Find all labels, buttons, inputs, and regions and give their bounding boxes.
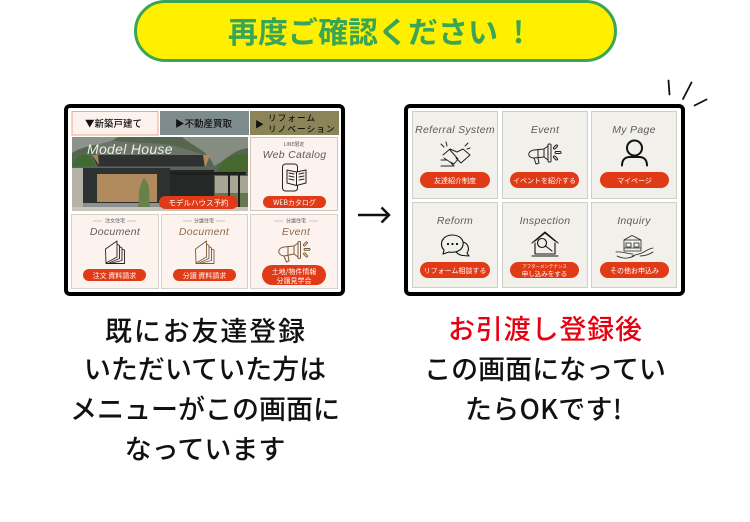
card: subdivision document: 分譲住宅 (194, 218, 214, 224)
card: my page (592, 112, 676, 198)
card: referral system (412, 112, 498, 198)
card: custom home document: Document (90, 226, 141, 238)
photo: model house (72, 137, 248, 211)
icon: handshake (441, 142, 470, 166)
tab: real estate purchase (160, 111, 249, 135)
card: event: 分譲住宅 (286, 218, 306, 224)
tab: reform and renovation: ▶ (255, 118, 264, 130)
icon: phone with catalog (282, 164, 306, 191)
title banner: ! (513, 8, 524, 52)
button: other applications: その他お申込み (610, 266, 659, 276)
icon: brochure (196, 241, 214, 264)
emphasis rays (668, 80, 706, 106)
arrow (358, 208, 389, 222)
card: inquiry: Inquiry (617, 215, 651, 227)
card: event: Event (282, 226, 311, 238)
card: subdivision document: Document (179, 226, 230, 238)
button: after-maintenance application (510, 262, 579, 278)
text block: existing users: なっています (125, 428, 285, 467)
card: my page: My Page (612, 124, 656, 136)
tab: reform and renovation (250, 111, 339, 135)
title banner: 再度ご確認ください (228, 8, 498, 52)
text block: existing users: 既にお友達登録 (105, 310, 305, 349)
button: my page: マイページ (617, 176, 652, 186)
icon: person (622, 140, 647, 166)
card: event: Event (531, 124, 560, 136)
tab: new detached houses: ▼新築戸建て (85, 116, 142, 130)
icon: speech bubbles (441, 235, 469, 256)
button: land and open house (262, 265, 326, 286)
button: event intro: イベントを紹介する (513, 176, 576, 186)
text block: existing users (70, 310, 340, 467)
card: custom home document: 注文住宅 (105, 218, 125, 224)
button: custom home brochure request: 注文 資料請求 (93, 271, 136, 281)
text block: after handover: この画面になってい (424, 348, 666, 387)
text block: after handover: お引渡し登録後 (448, 308, 642, 347)
card: reform: Reform (437, 215, 473, 227)
tab: real estate purchase: ▶不動産買取 (175, 116, 233, 130)
button: land and open house: 土地/物件情報 (272, 267, 316, 277)
tab: reform and renovation: リフォーム (268, 112, 316, 124)
card: reform (412, 202, 498, 288)
button: after-maintenance application: 申し込みをする (522, 268, 567, 278)
icon: megaphone (529, 144, 561, 164)
button: referral: 友達紹介制度 (434, 176, 476, 186)
title banner (136, 2, 616, 60)
card: inquiry (592, 202, 676, 288)
card: event (502, 112, 588, 198)
button: subdivision brochure request: 分譲 資料請求 (183, 271, 226, 281)
card: web catalog: Web Catalog (263, 149, 326, 161)
card: subdivision document (162, 214, 248, 288)
text block: after handover: たらOKです! (465, 388, 622, 427)
button: model house reservation (159, 196, 238, 209)
button: after-maintenance application: アフターメンテナンス (522, 263, 567, 270)
tab: reform and renovation: リノベーション (268, 123, 336, 135)
button: land and open house: 分譲見学会 (276, 276, 312, 286)
photo: model house: Model House (87, 141, 173, 157)
icon: house with magnifier (532, 232, 558, 256)
icon: brochure (106, 241, 124, 264)
card: event (250, 214, 338, 288)
tab: new detached houses (72, 112, 158, 135)
card: referral system: Referral System (415, 124, 495, 136)
card: inspection: Inspection (520, 215, 570, 227)
icon: megaphone (279, 242, 310, 262)
card: inspection (502, 202, 588, 288)
card: custom home document (72, 214, 158, 288)
text block: existing users: メニューがこの画面に (70, 388, 340, 427)
button: model house reservation: モデルハウス予約 (168, 198, 229, 208)
card: web catalog (250, 138, 338, 210)
text block: after handover (424, 308, 666, 427)
button: reform consultation: リフォーム相談する (424, 266, 486, 276)
text block: existing users: いただいていた方は (84, 348, 326, 387)
panel: existing menu screen (66, 106, 343, 294)
icon: house over hands (616, 236, 653, 258)
button: web catalog: WEBカタログ (273, 198, 316, 208)
card: web catalog: LINE限定 (284, 141, 304, 148)
panel: updated menu screen (406, 106, 683, 294)
